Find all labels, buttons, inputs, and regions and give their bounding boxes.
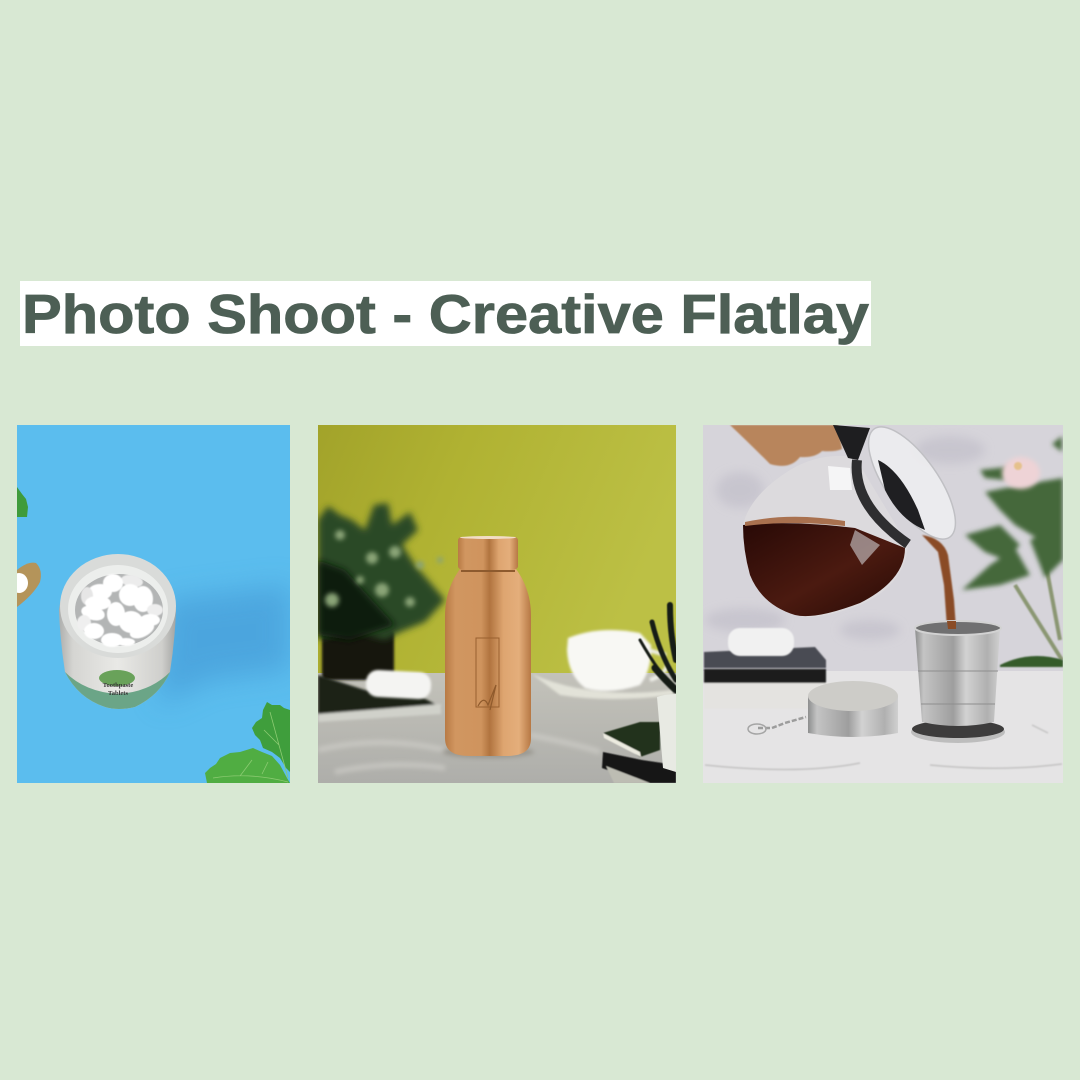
books and phone	[704, 647, 834, 709]
carafe collar	[857, 460, 908, 544]
coffee carafe	[730, 414, 971, 617]
collapsible steel cup	[911, 621, 1005, 743]
white tumbler	[657, 694, 676, 772]
marble veins	[705, 725, 1062, 770]
icon: mint leaves bottom right	[205, 702, 290, 783]
coffee stream	[922, 535, 956, 628]
white cup and saucer	[532, 630, 673, 699]
title: Photo Shoot - Creative Flatlay	[22, 283, 869, 345]
jar	[59, 554, 176, 709]
marble veins	[318, 735, 600, 772]
plant with pot	[318, 503, 445, 680]
panel: coffee pouring into steel cup	[703, 425, 1063, 783]
carafe rim	[853, 414, 971, 552]
flower plant	[962, 436, 1063, 667]
jar shadow	[160, 585, 290, 705]
earbuds case	[365, 669, 432, 700]
copper bottle	[442, 536, 534, 758]
jar label: Toothpaste	[103, 682, 133, 689]
desk plant	[640, 605, 676, 690]
icon: shell with tablet	[10, 563, 41, 607]
steel lid with chain	[748, 681, 898, 737]
wall texture	[705, 436, 985, 640]
jar label	[99, 670, 135, 697]
panel: copper bottle on olive background	[318, 425, 676, 783]
carafe handle	[833, 425, 870, 460]
earbuds case	[728, 628, 794, 656]
icon: mint leaf top left	[17, 487, 28, 517]
panel: toothpaste tablets jar on blue background	[17, 425, 290, 783]
jar label: Tablets	[108, 690, 128, 697]
tablets	[77, 573, 163, 647]
carafe interior	[878, 460, 925, 530]
hand	[730, 425, 842, 466]
stacked books	[602, 722, 676, 783]
bottle engraved logo	[476, 638, 499, 710]
laptop	[318, 675, 442, 722]
